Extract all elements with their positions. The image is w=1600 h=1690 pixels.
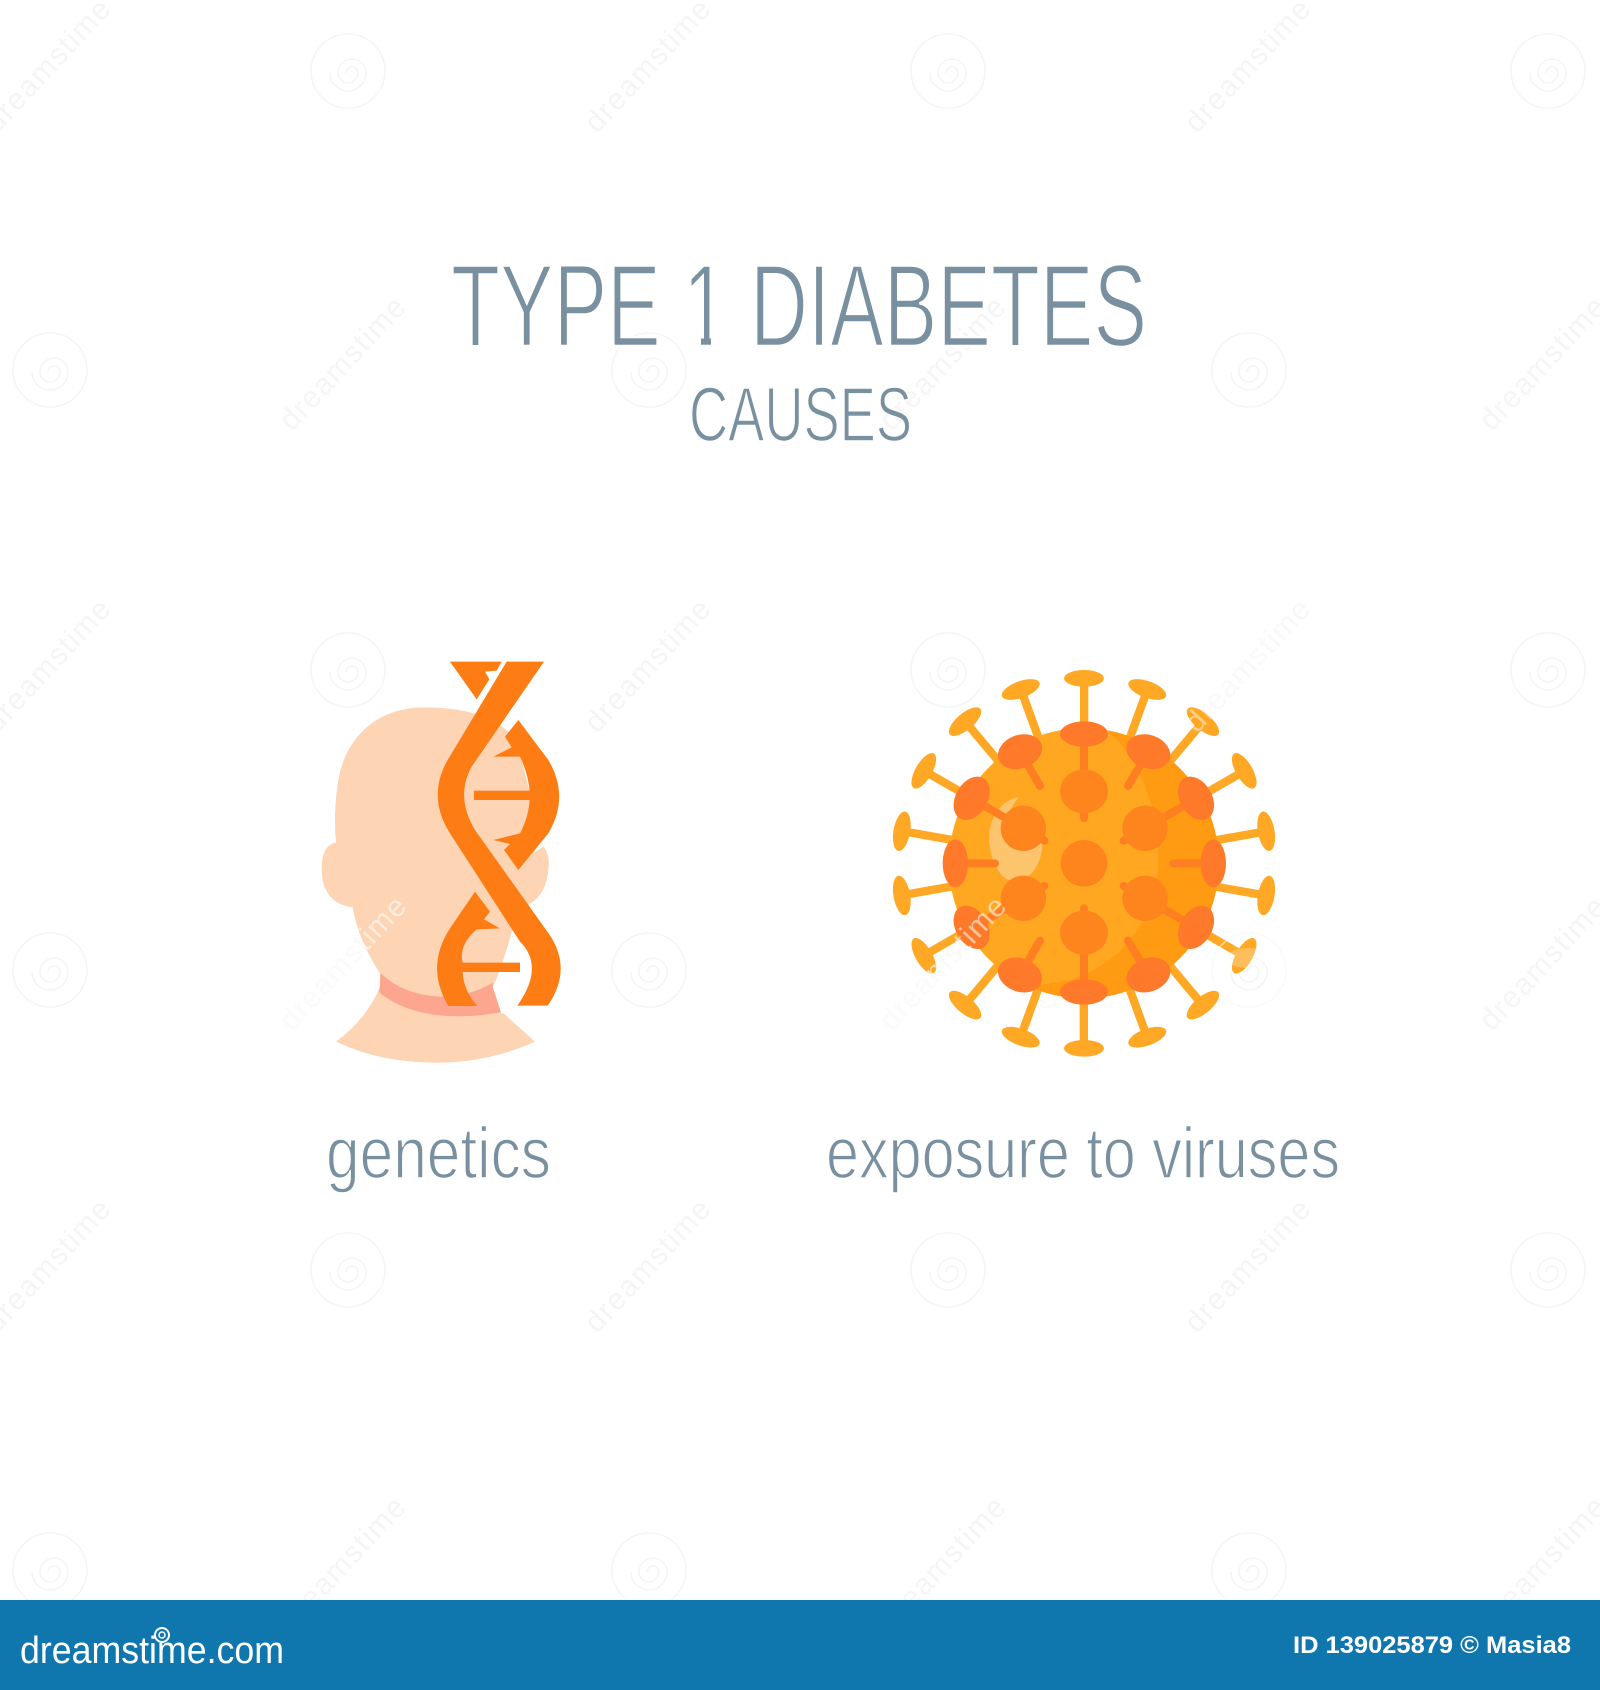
dna middle rung	[474, 791, 532, 800]
neck shadow	[379, 973, 502, 1016]
watermark pattern: dreamstime	[273, 1490, 413, 1637]
footer credit: ID 139025879 © Masia8	[1293, 1632, 1571, 1659]
label: genetics: genetics	[326, 1114, 551, 1194]
stems	[955, 733, 1213, 993]
label: exposure to viruses: exposure to viruses	[826, 1114, 1340, 1194]
dna upper right strand	[493, 720, 559, 870]
watermark pattern: dreamstime	[273, 890, 413, 1037]
icon: virus	[890, 670, 1278, 1057]
dna strand main	[438, 662, 561, 1006]
edge blobs	[943, 721, 1226, 1005]
body	[949, 728, 1219, 998]
highlight	[989, 797, 1043, 881]
watermark pattern: dreamstime	[578, 1192, 718, 1339]
watermark overlay on icons: dreamstime	[1178, 592, 1318, 739]
watermark pattern: dreamstime	[273, 290, 413, 437]
watermark pattern: dreamstime	[873, 890, 1013, 1037]
subtitle: CAUSES	[689, 372, 912, 458]
watermark overlay on icons: dreamstime	[873, 890, 1013, 1037]
watermark overlay on icons	[273, 592, 1318, 1037]
head	[322, 707, 549, 1063]
dna lower left strand	[437, 892, 520, 1006]
watermark pattern: dreamstime	[873, 290, 1013, 437]
watermark pattern: dreamstime	[1178, 1192, 1318, 1339]
watermark overlay on icons: dreamstime	[273, 890, 413, 1037]
icon: head with DNA helix	[322, 662, 567, 1063]
watermark pattern: dreamstime	[873, 1490, 1013, 1637]
body light region	[951, 730, 1158, 985]
title: TYPE 1 DIABETES	[451, 240, 1147, 371]
dna top fragment	[450, 662, 502, 699]
footer logo: dreamstime.com	[20, 1630, 284, 1672]
watermark pattern: dreamstime	[1178, 592, 1318, 739]
white cut right of helix	[493, 930, 563, 1013]
spikes	[890, 670, 1278, 1057]
inner circles	[1001, 769, 1168, 955]
digit foot cleanup	[686, 335, 726, 348]
footer bar	[0, 1600, 1600, 1690]
watermark pattern: dreamstime	[578, 592, 718, 739]
